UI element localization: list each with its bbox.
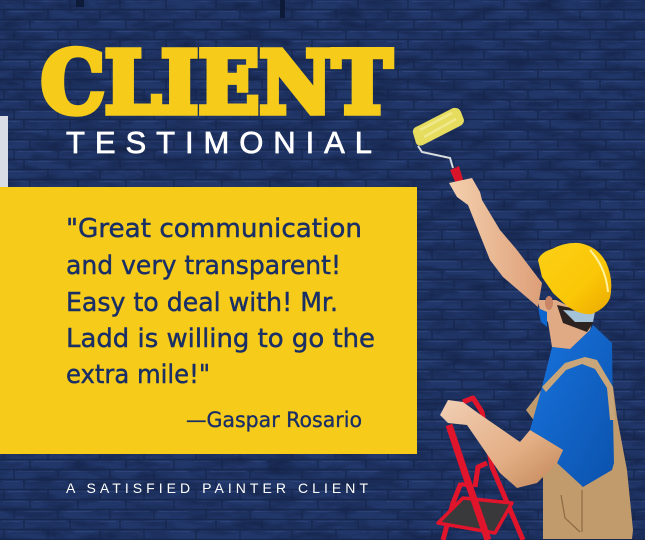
neck and head: [538, 300, 593, 349]
quote text: and very transparent!: [66, 251, 341, 281]
white window edge at left: [0, 116, 8, 187]
icon: paint roller: [413, 108, 464, 186]
lower arm and hand: [440, 400, 563, 488]
icon: ladder: [438, 398, 523, 540]
quote text: extra mile!": [66, 360, 210, 390]
illustration: painter on step ladder: [413, 108, 633, 540]
raised arm: [449, 178, 542, 307]
panel: yellow quote box: [0, 187, 417, 454]
hat highlights: [590, 250, 608, 292]
quote text: Ladd is willing to go the: [66, 324, 375, 354]
shirt: [530, 325, 614, 487]
quote text: [66, 214, 375, 390]
ear: [545, 296, 553, 310]
subtitle: TESTIMONIAL: TESTIMONIAL: [66, 125, 372, 160]
quote text: Easy to deal with! Mr.: [66, 288, 338, 318]
overalls: [526, 357, 633, 539]
blue mask: [538, 308, 547, 327]
overall strap: [542, 357, 615, 420]
title: CLIENT: CLIENT: [41, 34, 392, 134]
light blue cap band: [563, 310, 595, 322]
wall marks at top edge: [76, 0, 285, 18]
quote attribution: —Gaspar Rosario: [186, 408, 362, 433]
overall seam details: [561, 490, 582, 532]
hair: [557, 305, 593, 332]
footer caption: A SATISFIED PAINTER CLIENT: [66, 480, 368, 496]
quote text: "Great communication: [66, 214, 362, 244]
hard hat: [538, 243, 611, 314]
